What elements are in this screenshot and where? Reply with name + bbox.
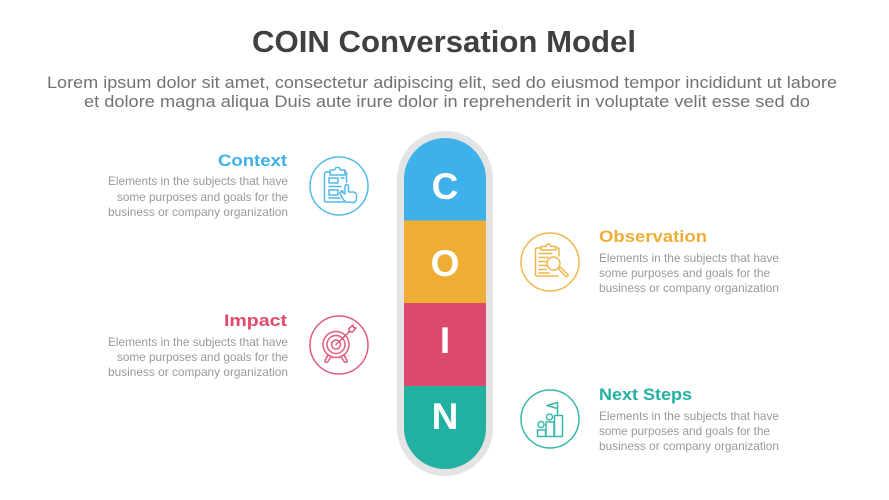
central COIN capsule [397, 131, 493, 476]
text block: Impact [108, 336, 288, 379]
subtitle: et dolore magna aliqua Duis aute irure dolor in reprehenderit in voluptate velit esse sed do [84, 92, 810, 111]
subtitle: Lorem ipsum dolor sit amet, consectetur adipiscing elit, sed do eiusmod tempor incididunt ut labore [47, 73, 837, 92]
panel: Next Steps [521, 386, 779, 453]
text block: Impact: Elements in the subjects that have [108, 336, 288, 349]
text block: Context: some purposes and goals for the [117, 191, 288, 204]
panel: Context [108, 152, 368, 219]
text block: Context: Elements in the subjects that have [108, 175, 288, 188]
segment I [404, 303, 486, 386]
text block: Next Steps: Elements in the subjects that have [599, 410, 779, 423]
text block: Context [108, 175, 288, 219]
text block: Observation: Elements in the subjects that have [599, 252, 779, 265]
heading: Impact: Impact [224, 312, 288, 330]
panel: Observation [521, 228, 779, 295]
text block: Context: business or company organization [108, 206, 288, 219]
text block: Observation: business or company organization [599, 282, 779, 295]
subtitle [47, 73, 837, 111]
segment O [404, 220, 486, 304]
icon: clipboard with hand [310, 157, 368, 215]
text block: Next Steps: business or company organization [599, 440, 779, 453]
segment C: C [432, 166, 458, 207]
segment O: O [431, 243, 459, 284]
segment I: I [440, 320, 450, 361]
heading: Observation: Observation [599, 228, 707, 246]
segment N [404, 386, 486, 469]
text block: Impact: business or company organization [108, 366, 288, 379]
text block: Impact: some purposes and goals for the [117, 351, 288, 364]
text block: Next Steps [599, 410, 779, 453]
segment C [404, 138, 486, 220]
title: COIN Conversation Model [252, 25, 636, 59]
heading: Context: Context [218, 152, 288, 170]
icon: target with arrow [310, 316, 368, 374]
heading: Next Steps: Next Steps [599, 386, 692, 404]
panel: Impact [108, 312, 368, 379]
text block: Next Steps: some purposes and goals for the [599, 425, 770, 438]
text block: Observation [599, 252, 779, 295]
icon: steps with flag [521, 390, 579, 448]
icon: clipboard with magnifier [521, 233, 579, 291]
segment N: N [432, 396, 458, 437]
text block: Observation: some purposes and goals for the [599, 267, 770, 280]
